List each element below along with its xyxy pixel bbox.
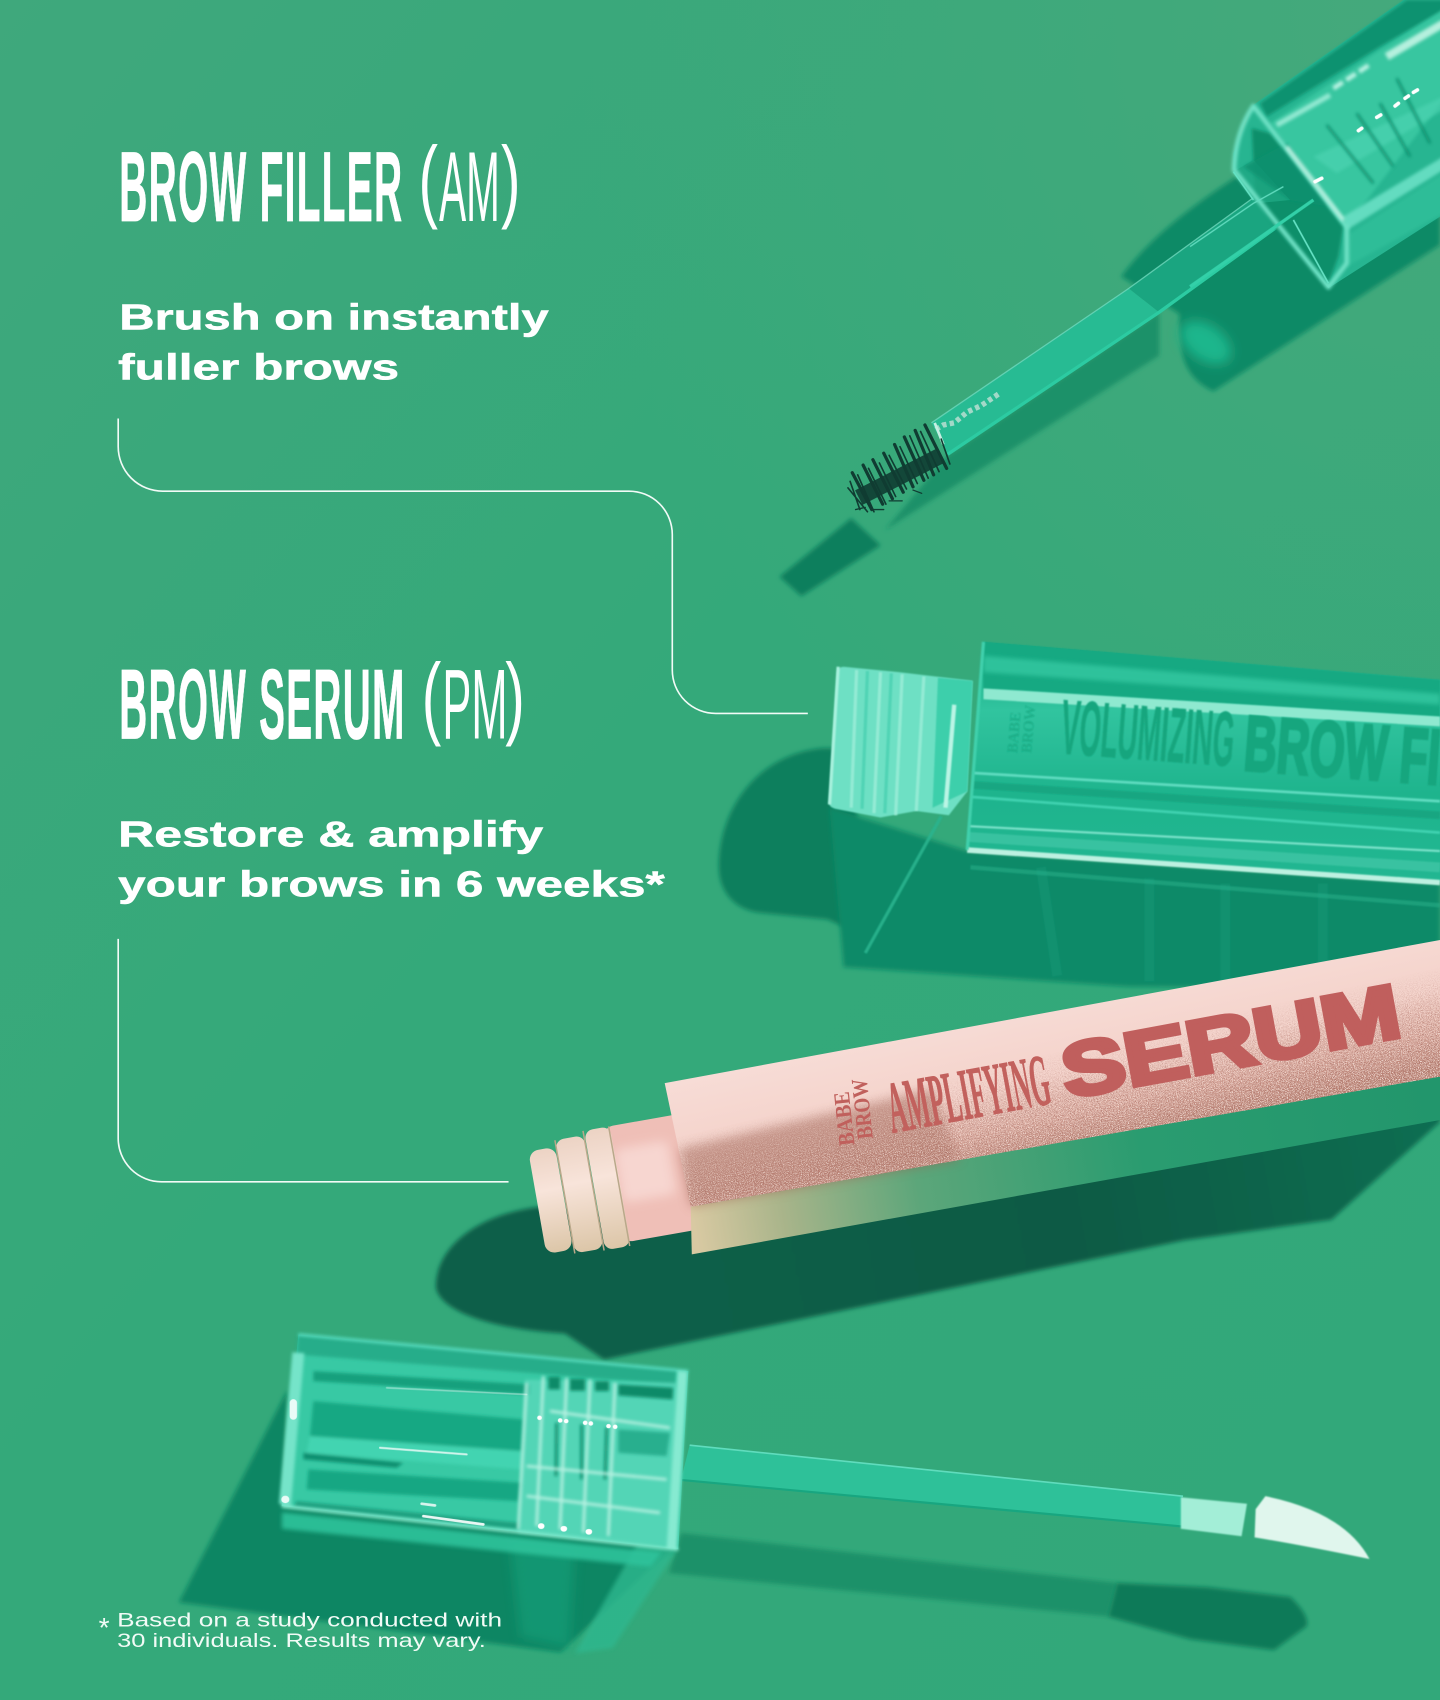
product: pink amplifying serum tube: AMPLIFYING bbox=[880, 1038, 1056, 1149]
shadows: clear tube bbox=[719, 748, 1440, 989]
cap ribs bbox=[556, 1423, 607, 1479]
clear cap in reference-crop coordinates bbox=[282, 1334, 688, 1549]
threaded neck bbox=[526, 1113, 703, 1260]
product: clear brow filler tube bbox=[829, 642, 1440, 883]
printed tube label: BABE bbox=[1004, 711, 1025, 754]
shadows: applicator bbox=[179, 1390, 1307, 1653]
applicator connector bbox=[1181, 1497, 1247, 1536]
heading: brow filler am bbox=[119, 127, 520, 243]
text: brow filler description: Brush on instantly bbox=[119, 298, 549, 338]
tube underside bbox=[691, 1077, 1440, 1254]
cap ribs bbox=[1315, 78, 1430, 183]
wand stem bbox=[931, 288, 1159, 454]
footnote: 30 individuals. Results may vary. bbox=[117, 1631, 486, 1652]
cap rim bbox=[1234, 106, 1347, 287]
heading: brow serum pm: ) bbox=[505, 644, 525, 747]
heading: brow filler am: ) bbox=[501, 127, 520, 230]
heading: brow serum pm: ( bbox=[422, 644, 442, 747]
cap rib zone bbox=[518, 1379, 677, 1546]
heading: brow filler am: ( bbox=[419, 127, 438, 230]
tube ridges bbox=[967, 642, 1440, 883]
printed tube label: BROW bbox=[1018, 705, 1039, 754]
product: lip-style applicator with clear cap bbox=[282, 1334, 1370, 1559]
printed text: babe brow bbox=[829, 1077, 878, 1147]
cap edges bbox=[282, 1334, 688, 1549]
light streaks in the tube shadow bbox=[865, 816, 1440, 987]
heading: brow filler am: BROW FILLER bbox=[119, 132, 403, 243]
heading: brow serum pm bbox=[119, 644, 525, 760]
printed text: serum: SERUM bbox=[1055, 969, 1407, 1115]
footnote: * bbox=[99, 1611, 110, 1643]
text: brow filler description bbox=[118, 298, 549, 387]
text: brow filler description: fuller brows bbox=[118, 347, 399, 387]
threaded neck bbox=[829, 667, 973, 817]
cap highlights bbox=[285, 1388, 615, 1532]
cap top band bbox=[297, 1334, 677, 1384]
heading: brow filler am: AM bbox=[439, 132, 500, 243]
text: brow serum description bbox=[118, 815, 665, 905]
brush bristles bbox=[848, 425, 950, 512]
cap body bbox=[1233, 0, 1440, 288]
applicator stem bbox=[681, 1445, 1183, 1527]
printed text: babe brow: BROW bbox=[847, 1077, 878, 1140]
connector line: brow serum to tube bbox=[118, 939, 509, 1182]
wand inside cap bbox=[1190, 200, 1313, 287]
clear cap in reference-crop coordinates bbox=[1190, 0, 1440, 288]
shadows: brush wand bbox=[780, 108, 1440, 596]
product: pink amplifying serum tube bbox=[526, 940, 1440, 1260]
text: brow serum description: your brows in 6 weeks* bbox=[118, 865, 665, 905]
product: brush wand with cap bbox=[848, 0, 1440, 512]
cap highlights bbox=[1277, 23, 1440, 220]
cap window bbox=[1252, 128, 1343, 283]
footnote: Based on a study conducted with bbox=[117, 1610, 502, 1631]
cap stripes bbox=[293, 1371, 530, 1529]
text: brow serum description: Restore & amplify bbox=[118, 815, 543, 855]
heading: brow serum pm: BROW SERUM bbox=[119, 649, 406, 760]
tube face bbox=[665, 940, 1440, 1207]
heading: brow serum pm: PM bbox=[442, 649, 507, 760]
applicator tip bbox=[1255, 1496, 1370, 1559]
footnote bbox=[99, 1610, 502, 1652]
tube body bbox=[967, 642, 1440, 883]
shadows: serum tube bbox=[436, 1084, 1440, 1360]
connector line: brow filler to tube bbox=[118, 418, 808, 713]
twisted wire bbox=[936, 392, 1001, 429]
printed text: babe brow: BABE bbox=[829, 1090, 859, 1147]
cap body bbox=[282, 1334, 688, 1549]
